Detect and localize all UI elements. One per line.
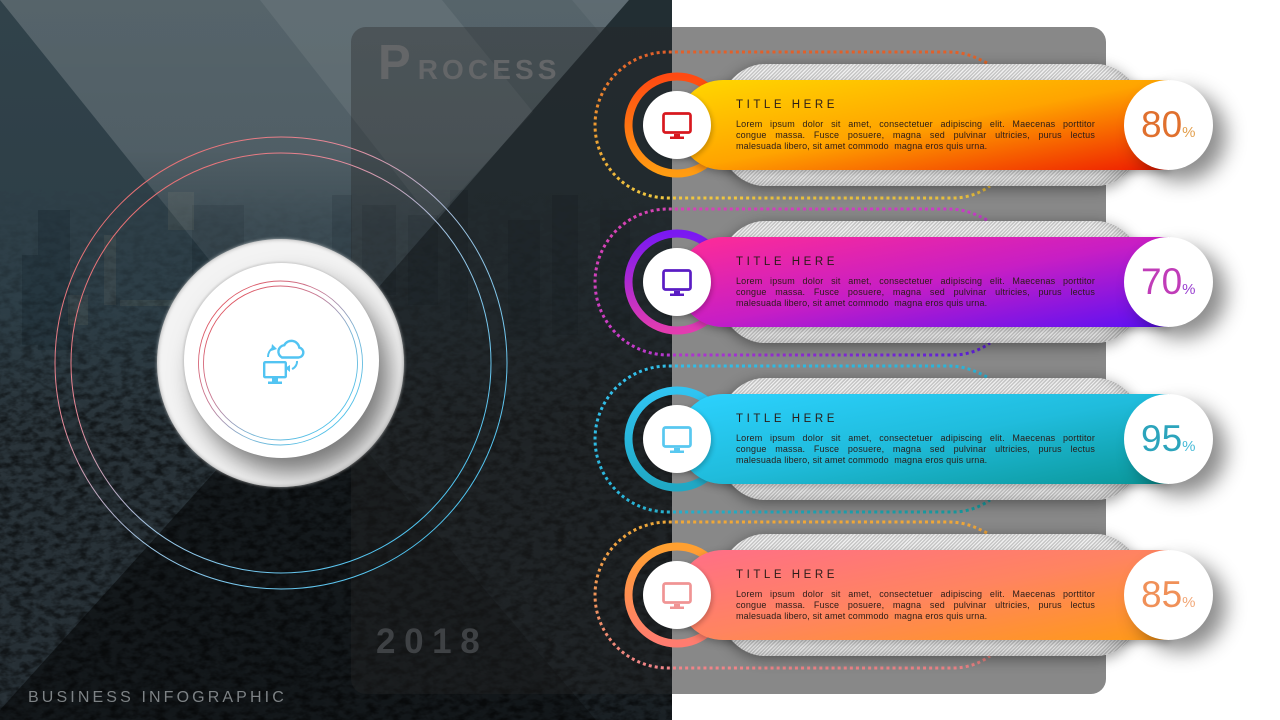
striped capsule: [715, 534, 1146, 656]
text block: [736, 413, 1095, 465]
striped capsule: [715, 378, 1146, 500]
icon: monitor: [643, 561, 711, 629]
text block: Lorem ipsum dolor sit amet, consectetuer adipiscing elit. Maecenas porttitor: [736, 119, 1095, 129]
text block: malesuada libero, sit amet commodo magna eros quis urna.: [736, 298, 987, 308]
row 3: 95% cyan: [594, 364, 1239, 514]
percentage badge: [1124, 550, 1213, 640]
dotted outline arc: [594, 520, 991, 670]
icon: monitor: [643, 405, 711, 473]
striped capsule: [715, 64, 1146, 186]
gradient bar: [678, 550, 1170, 640]
decorative orbit rings: [54, 136, 508, 590]
dotted outline arc: [594, 208, 991, 356]
text block: [736, 569, 1095, 621]
text block: congue massa. Fusce posuere, magna sed pulvinar ultricies, purus lectus: [736, 600, 1095, 610]
heading: Process: PROCESS: [378, 36, 561, 90]
gradient bar: [678, 80, 1170, 170]
icon: monitor: [643, 91, 711, 159]
heading: year 2018: 2018: [376, 622, 488, 661]
text block: [736, 256, 1095, 308]
caption: business infographic: BUSINESS INFOGRAPHIC: [28, 689, 287, 706]
percentage badge: 85%: [1141, 574, 1196, 615]
gradient bar: [678, 237, 1170, 327]
percentage badge: [1124, 80, 1213, 170]
percentage badge: 70%: [1141, 261, 1196, 302]
dotted outline arc: [594, 50, 991, 200]
panel: translucent rounded backdrop: [351, 27, 1106, 694]
background: city photo with X triangles: [0, 0, 672, 720]
text block: congue massa. Fusce posuere, magna sed pulvinar ultricies, purus lectus: [736, 444, 1095, 454]
text block: TITLE HERE: [736, 413, 838, 425]
percentage badge: [1124, 394, 1213, 484]
icon: monitor: [643, 248, 711, 316]
text block: malesuada libero, sit amet commodo magna eros quis urna.: [736, 611, 987, 621]
row 1: 80% orange: [594, 50, 1239, 200]
row 2: 70% magenta: [594, 208, 1239, 356]
striped capsule: [715, 221, 1146, 343]
text block: Lorem ipsum dolor sit amet, consectetuer adipiscing elit. Maecenas porttitor: [736, 589, 1095, 599]
text block: malesuada libero, sit amet commodo magna eros quis urna.: [736, 455, 987, 465]
text block: Lorem ipsum dolor sit amet, consectetuer adipiscing elit. Maecenas porttitor: [736, 433, 1095, 443]
text block: congue massa. Fusce posuere, magna sed pulvinar ultricies, purus lectus: [736, 130, 1095, 140]
text block: [736, 99, 1095, 151]
text block: congue massa. Fusce posuere, magna sed pulvinar ultricies, purus lectus: [736, 287, 1095, 297]
text block: TITLE HERE: [736, 569, 838, 581]
inner white plate: [184, 263, 379, 458]
percentage badge: 95%: [1141, 418, 1196, 459]
text block: malesuada libero, sit amet commodo magna eros quis urna.: [736, 141, 987, 151]
percentage badge: [1124, 237, 1213, 327]
central disk: [157, 239, 404, 487]
dotted outline arc: [594, 364, 991, 514]
inner rings and cloud computer icon: [198, 280, 363, 446]
text block: TITLE HERE: [736, 256, 838, 268]
percentage badge: 80%: [1141, 104, 1196, 145]
text block: Lorem ipsum dolor sit amet, consectetuer adipiscing elit. Maecenas porttitor: [736, 276, 1095, 286]
text block: TITLE HERE: [736, 99, 838, 111]
row 4: 85% coral: [594, 520, 1239, 670]
gradient bar: [678, 394, 1170, 484]
